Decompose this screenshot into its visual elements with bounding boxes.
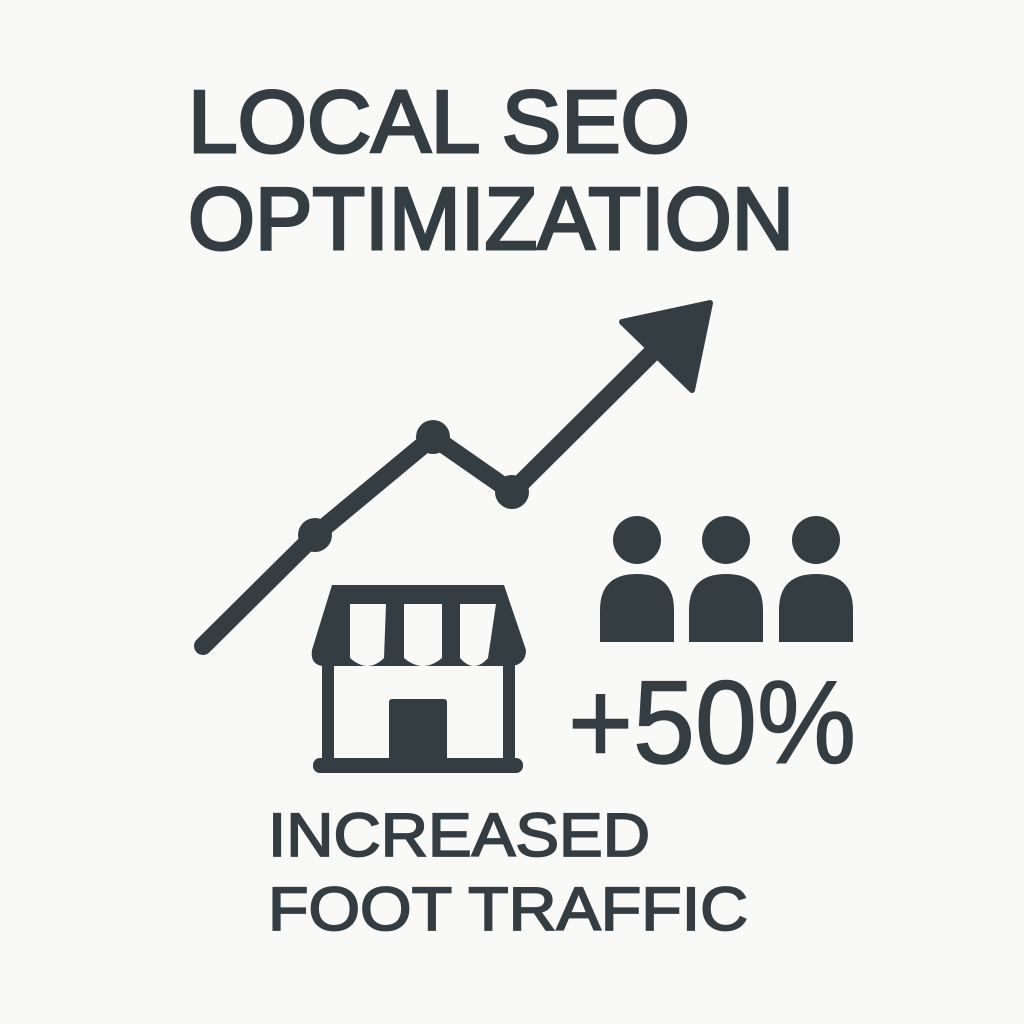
icon: three people [600, 516, 853, 642]
chart: rising trend line with arrow [203, 303, 710, 646]
title: OPTIMIZATION [188, 169, 794, 268]
icon: storefront [312, 585, 526, 773]
caption: FOOT TRAFFIC [268, 875, 748, 943]
caption [268, 801, 748, 943]
stat: +50%: +50% [568, 657, 856, 789]
title [188, 72, 794, 268]
caption: INCREASED [268, 801, 650, 869]
title: LOCAL SEO [188, 72, 690, 171]
